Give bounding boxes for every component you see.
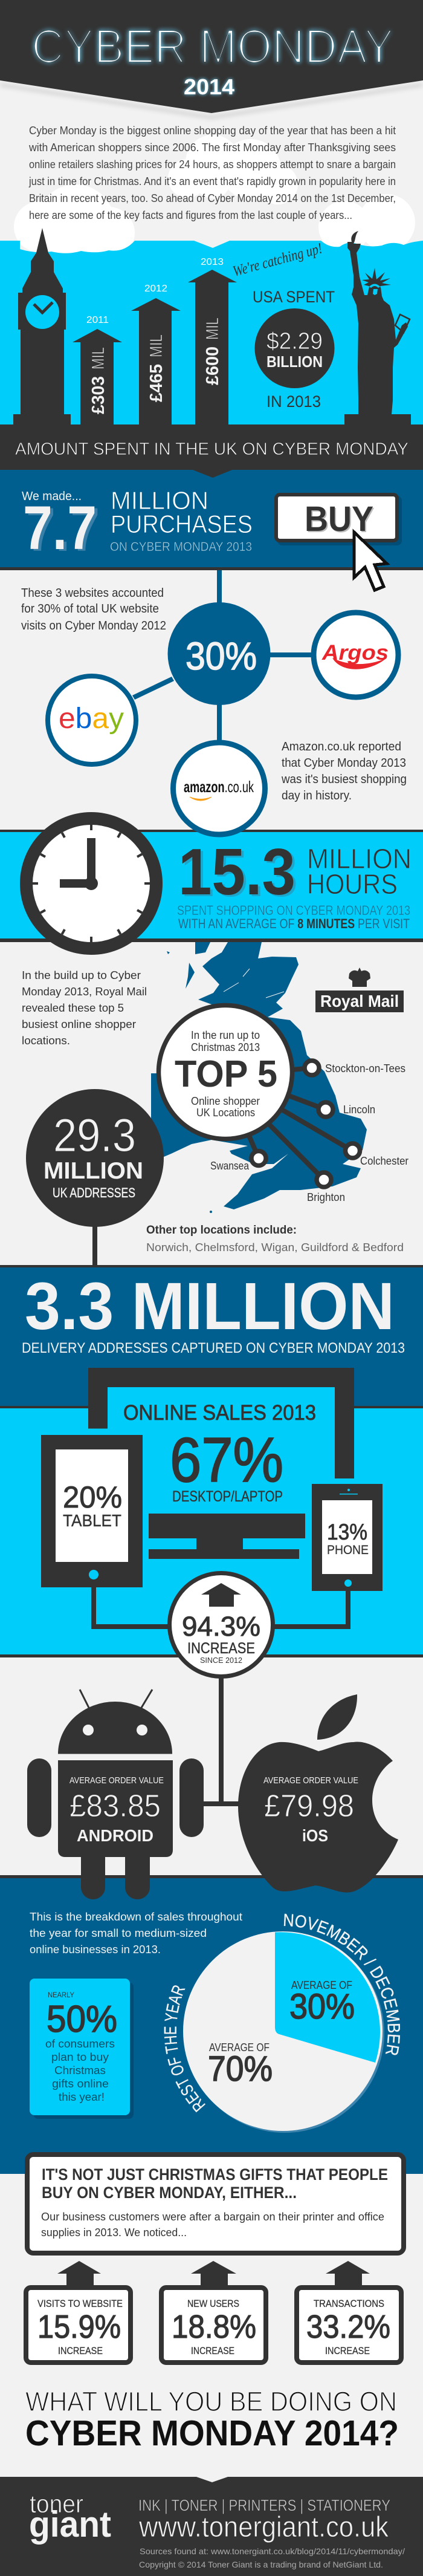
arrow: 2012 (131, 284, 181, 424)
map pins and labels: Colchester (360, 1155, 408, 1167)
callout: top 5 circle: In the run up to (191, 1029, 260, 1041)
callout: nearly 50% (30, 1979, 134, 2119)
pie chart: sales by period: AVERAGE OF (209, 2041, 270, 2054)
closing question: CYBER MONDAY 2014? (25, 2413, 399, 2453)
text: three websites (21, 587, 166, 633)
stat: new users: 18.8% (172, 2309, 256, 2345)
icon: android (27, 1690, 204, 1899)
panel: navy sales breakdown background (0, 1875, 423, 2174)
stat: visits to website: VISITS TO WEBSITE (37, 2298, 123, 2309)
year: 2014 (184, 74, 234, 99)
map pins and labels: Stockton-on-Tees (325, 1062, 405, 1075)
arrow: 2011: 2011 (86, 315, 109, 325)
header banner (0, 0, 423, 119)
logo: Amazon: amazon.co.uk (184, 778, 254, 796)
panel: footer: Sources found at: www.tonergiant.co.uk/blog/2014/11/cybermonday/ (140, 2546, 405, 2556)
title: CYBER MONDAY (31, 19, 394, 73)
icon: Big Ben (13, 228, 71, 424)
text: Amazon note: that Cyber Monday 2013 (282, 756, 406, 770)
arrow: 2012: MIL (147, 334, 166, 357)
logo: Argos: Argos (321, 641, 389, 665)
pie chart: sales by period: REST OF THE YEAR (164, 1985, 205, 2113)
text: three websites: These 3 websites accounted (21, 587, 164, 600)
callout: not just Christmas gifts: IT'S NOT JUST CHRISTMAS GIFTS THAT PEOPLE (42, 2165, 388, 2184)
note: we're catching up: We're catching up! (231, 240, 324, 280)
button: BUY: BUY (305, 499, 373, 539)
logo: eBay: ebay (59, 703, 124, 735)
icon: cursor (354, 532, 387, 590)
map pins and labels: Lincoln (343, 1104, 375, 1116)
sky background (0, 241, 423, 424)
pie chart: sales by period: NOVEMBER / DECEMBER (284, 1913, 400, 2055)
arrow: 2011 (73, 315, 122, 424)
panel: footer: Copyright © 2014 Toner Giant is a trading brand of NetGiant Ltd. (139, 2560, 383, 2569)
connector lines: 30% hub (132, 570, 314, 752)
icon: phone: 13% (327, 1520, 367, 1544)
panel: online sales 2013 (0, 1368, 423, 1657)
device connector lines (94, 1584, 348, 1627)
icon: apple: iOS (302, 1826, 328, 1845)
text: Royal Mail intro: Monday 2013, Royal Mail (22, 986, 147, 998)
callout: 29.3 million addresses: UK ADDRESSES (53, 1185, 135, 1200)
callout: not just Christmas gifts (27, 2155, 404, 2253)
arrow: 2012: £465 (147, 364, 166, 402)
text: other top locations: Norwich, Chelmsford, Wigan, Guildford & Bedford (146, 1241, 404, 1254)
icon: tablet (41, 1435, 143, 1587)
callout: top 5 circle: Online shopper (191, 1095, 260, 1107)
connector: android to apple (204, 1801, 240, 1806)
clouds (14, 135, 415, 263)
callout: 94.3% increase: SINCE 2012 (200, 1656, 242, 1665)
callout: 29.3 million addresses: MILLION (44, 1158, 143, 1184)
text: sales breakdown intro (30, 1911, 242, 1956)
panel: 7.7 million purchases: ON CYBER MONDAY 2013 (110, 540, 252, 554)
intro paragraph: with American shoppers since 2006. The first Monday after Thanksgiving sees (28, 141, 396, 154)
stat: visits to website (26, 2261, 131, 2363)
callout: nearly 50%: NEARLY (48, 1991, 74, 1999)
callout: nearly 50%: of consumers (45, 2038, 115, 2050)
panel: 7.7 million purchases: MILLION (111, 486, 208, 515)
text: Royal Mail intro: In the build up to Cyber (22, 969, 141, 981)
hub: 30 percent: 30% (186, 634, 257, 678)
intro paragraph: Britain in recent years, too. So ahead of Cyber Monday 2014 on the 1st December, (29, 192, 396, 204)
panel: 7.7 million purchases: 7.7 (23, 493, 97, 562)
icon: desktop monitor: DESKTOP/LAPTOP (172, 1488, 283, 1505)
map pins and labels (210, 1061, 408, 1203)
map pins and labels: Brighton (307, 1191, 345, 1203)
stat: transactions (297, 2261, 401, 2363)
stat: new users: INCREASE (191, 2345, 234, 2356)
icon: clock (27, 819, 156, 948)
panel: 15.3 million hours band: MILLION (307, 843, 412, 874)
callout: nearly 50%: Christmas (54, 2064, 106, 2077)
callout: nearly 50%: 50% (47, 1999, 117, 2040)
pie chart: sales by period: AVERAGE OF (291, 1979, 352, 1991)
text: Royal Mail intro: busiest online shopper (22, 1018, 136, 1030)
panel: amount spent banner (0, 424, 423, 470)
callout: 94.3% increase (169, 1573, 273, 1805)
panel: 15.3 million hours band: WITH AN AVERAGE OF 8 MINUTES PER VISIT (178, 916, 410, 931)
pin connectors (249, 1068, 352, 1180)
stat: visits to website: 15.9% (37, 2309, 121, 2345)
logo: Toner Giant: toner (30, 2490, 83, 2518)
callout: USA spent (253, 288, 335, 411)
icon: android: AVERAGE ORDER VALUE (69, 1775, 164, 1786)
panel: 7.7 million purchases: We made... (22, 490, 82, 503)
panel: amount spent banner: AMOUNT SPENT IN THE UK ON CYBER MONDAY (15, 440, 408, 459)
intro paragraph: Cyber Monday is the biggest online shopping day of the year that has been a hit (29, 125, 396, 137)
button: BUY (276, 495, 402, 545)
icon: crown (349, 968, 370, 987)
map pins and labels: Swansea (210, 1160, 250, 1172)
text: sales breakdown intro: the year for small to medium-sized (30, 1927, 207, 1939)
callout: USA spent: IN 2013 (266, 392, 321, 411)
text: Amazon note: Amazon.co.uk reported (282, 740, 401, 753)
hub: 30 percent (168, 602, 271, 705)
callout: nearly 50%: this year! (59, 2091, 105, 2103)
arrow: 2013: £600 (203, 346, 222, 385)
callout: 29.3 million addresses (26, 1089, 164, 1267)
text: sales breakdown intro: online businesses in 2013. (30, 1943, 161, 1956)
callout: nearly 50%: plan to buy (51, 2051, 109, 2063)
stat: new users: NEW USERS (187, 2298, 239, 2309)
panel: 7.7 million purchases: PURCHASES (111, 510, 253, 538)
callout: 29.3 million addresses: 29.3 (53, 1110, 136, 1162)
logo: eBay (48, 676, 136, 764)
panel: 15.3 million hours band (0, 830, 423, 942)
callout: USA spent: BILLION (266, 353, 323, 371)
stat: visits to website: INCREASE (58, 2345, 103, 2356)
icon: tablet: TABLET (63, 1511, 121, 1530)
panel: 7.7 million purchases (0, 470, 423, 570)
panel: 3.3 million delivery addresses: 3.3 MILLION (25, 1269, 395, 1344)
text: other top locations (146, 1224, 404, 1254)
stat: transactions: TRANSACTIONS (314, 2298, 384, 2309)
callout: top 5 circle: TOP 5 (175, 1053, 277, 1095)
text: Royal Mail intro (22, 969, 147, 1047)
text: Amazon note: day in history. (282, 789, 352, 802)
text: three websites: for 30% of total UK website (21, 602, 159, 616)
panel: 15.3 million hours band: HOURS (307, 868, 398, 900)
stat: new users (161, 2261, 266, 2363)
callout: not just Christmas gifts: supplies in 2013. We noticed... (41, 2226, 187, 2239)
callout: USA spent: USA SPENT (253, 288, 335, 306)
panel: footer: www.tonergiant.co.uk (138, 2511, 389, 2543)
text: Amazon note (281, 740, 407, 802)
arrow: 2013: 2013 (201, 257, 224, 267)
intro paragraph (28, 125, 396, 221)
icon: phone: PHONE (327, 1543, 369, 1557)
text: Amazon note: was it's busiest shopping (281, 773, 407, 786)
closing question: WHAT WILL YOU BE DOING ON (25, 2386, 397, 2417)
arrow: 2011: £303 (89, 376, 108, 414)
arrow: 2013 (188, 257, 237, 424)
intro paragraph: online retailers slashing prices for 24 hours, as shoppers attempt to snare a bargain (29, 158, 396, 171)
callout: top 5 circle: UK Locations (196, 1107, 255, 1119)
logo: Royal Mail (315, 968, 404, 1012)
panel: 3.3 million delivery addresses (0, 1265, 423, 1406)
stat: transactions: INCREASE (325, 2345, 370, 2356)
icon: desktop monitor (88, 1368, 354, 1559)
text: Royal Mail intro: revealed these top 5 (22, 1002, 124, 1014)
panel: footer (0, 2477, 423, 2576)
icon: apple: £79.98 (264, 1789, 354, 1824)
icon: apple (238, 1694, 398, 1893)
text: three websites: visits on Cyber Monday 2012 (21, 619, 166, 633)
arrow: 2011: MIL (89, 347, 108, 369)
logo: Toner Giant: giant (29, 2504, 111, 2545)
intro paragraph: here are some of the key facts and figures from the last couple of years... (29, 209, 352, 221)
callout: 94.3% increase: 94.3% (182, 1611, 260, 1642)
logo: Royal Mail: Royal Mail (320, 992, 399, 1010)
callout: USA spent: $2.29 (266, 328, 323, 354)
pie chart: sales by period: 70% (208, 2049, 273, 2089)
panel: UK map (151, 942, 367, 1213)
pie chart: sales by period (164, 1913, 400, 2133)
icon: tablet: 20% (63, 1480, 122, 1514)
logo: Amazon (173, 743, 265, 834)
icon: Statue of Liberty (344, 231, 411, 424)
callout: 94.3% increase: INCREASE (187, 1640, 255, 1657)
intro paragraph: just in time for Christmas. And it's an event that's rapidly grown in popularity here in (28, 175, 396, 187)
callout: not just Christmas gifts: BUY ON CYBER MONDAY, EITHER... (42, 2184, 297, 2202)
text: other top locations: Other top locations include: (146, 1224, 297, 1237)
arrow: 2013: MIL (203, 317, 222, 340)
icon: desktop monitor: 67% (170, 1425, 283, 1495)
callout: not just Christmas gifts: Our business customers were after a bargain on their printer and office (41, 2211, 384, 2223)
button: BUY: BUY (306, 501, 375, 540)
panel: 15.3 million hours band: 15.3 (178, 835, 295, 909)
pie chart: sales by period: 30% (289, 1987, 355, 2026)
icon: apple: AVERAGE ORDER VALUE (263, 1775, 358, 1786)
icon: desktop monitor: ONLINE SALES 2013 (123, 1401, 316, 1425)
stat: transactions: 33.2% (306, 2309, 390, 2345)
callout: top 5 circle: Christmas 2013 (191, 1041, 260, 1053)
arrow: 2012: 2012 (144, 284, 167, 294)
callout: nearly 50%: gifts online (52, 2078, 109, 2090)
icon: android: ANDROID (77, 1826, 153, 1845)
callout: top 5 circle (158, 1005, 292, 1139)
text: sales breakdown intro: This is the breakdown of sales throughout (30, 1911, 242, 1923)
icon: android: £83.85 (69, 1789, 161, 1824)
text: Royal Mail intro: locations. (22, 1035, 70, 1047)
panel: sky with UK spending arrows (0, 228, 423, 424)
logo: Argos (314, 613, 398, 697)
closing question (25, 2386, 399, 2453)
icon: phone (312, 1484, 383, 1591)
